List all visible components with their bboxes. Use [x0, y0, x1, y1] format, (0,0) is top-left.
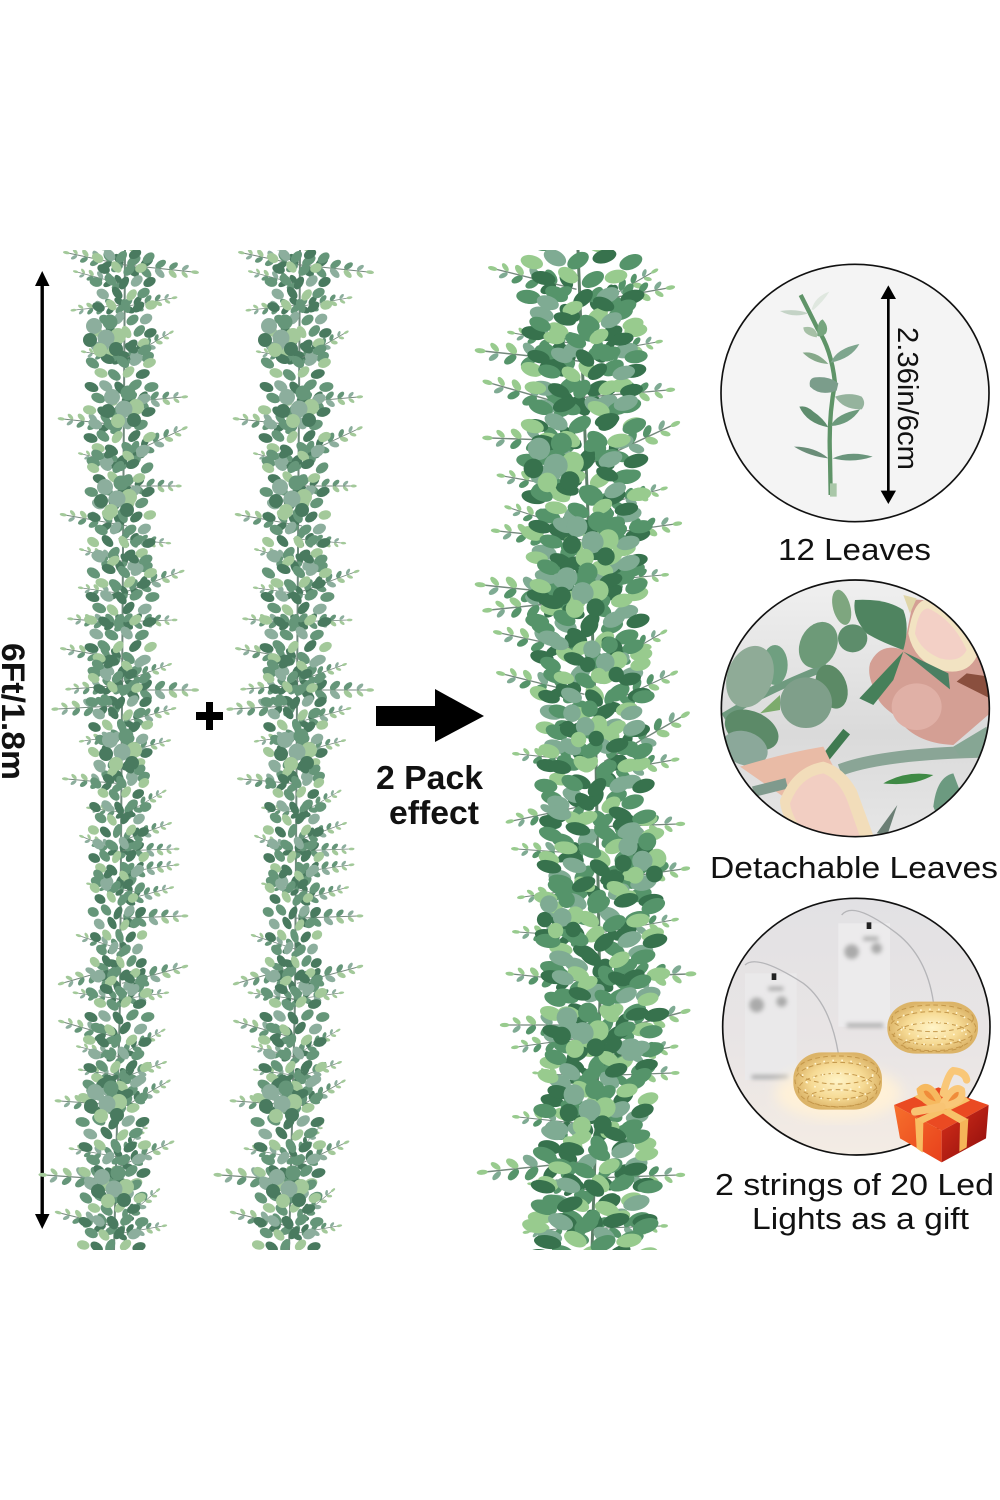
caption: LED lights as a gift	[715, 1167, 994, 1236]
icon: plus sign	[196, 702, 223, 730]
icon: red gift box	[894, 1071, 989, 1162]
caption: LED lights as a gift: Lights as a gift	[752, 1201, 969, 1236]
photo: single leaf stem	[721, 264, 989, 522]
garland: first single strand	[37, 234, 200, 1306]
panel: detachable leaves	[717, 578, 992, 840]
caption: detachable leaves: Detachable Leaves	[710, 850, 998, 885]
photo: fingers detaching leaf	[717, 578, 992, 840]
photo: LED string lights	[720, 897, 993, 1157]
heading: 2 pack effect	[376, 759, 484, 831]
garland: combined two pack	[473, 228, 698, 1382]
garland: second single strand	[212, 234, 375, 1306]
heading: 2 pack effect: effect	[389, 794, 479, 831]
caption: LED lights as a gift: 2 strings of 20 Led	[715, 1167, 994, 1202]
circle outline	[721, 264, 989, 522]
height arrow	[35, 271, 50, 1229]
heading: 2 pack effect: 2 Pack	[376, 759, 484, 796]
panel: LED lights gift	[720, 897, 993, 1162]
panel: leaf size	[721, 264, 989, 522]
dimension label: 2.36in/6cm	[891, 327, 923, 470]
arrow: to combined effect	[376, 689, 484, 742]
circle outline	[721, 580, 989, 837]
circle outline	[723, 898, 990, 1155]
dimension arrow	[881, 285, 896, 504]
caption: 12 leaves: 12 Leaves	[778, 532, 931, 567]
